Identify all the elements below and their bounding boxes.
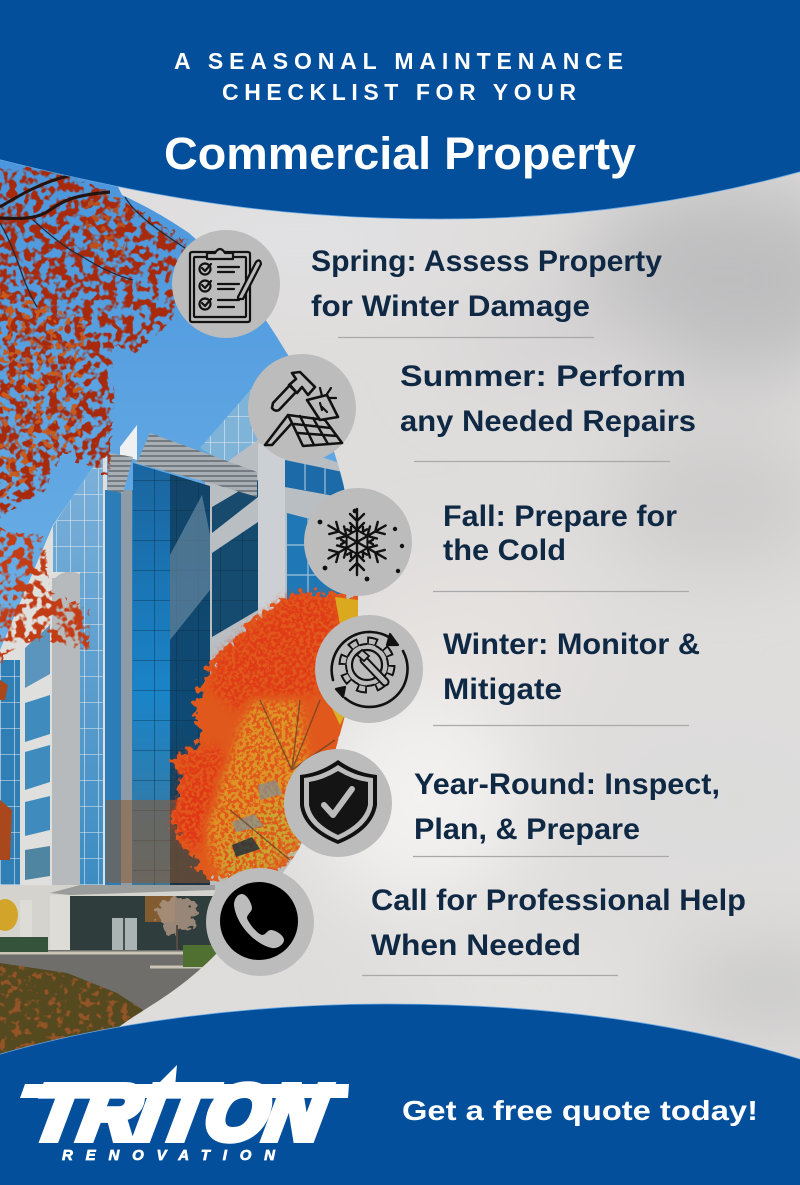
tree canopy base — [170, 593, 358, 880]
photo: office building with autumn trees — [0, 150, 360, 1070]
step 5: year-round — [284, 749, 720, 857]
building upper rear glass — [200, 388, 258, 462]
tree gaps and branches — [232, 780, 282, 832]
step 2: summer — [248, 354, 696, 462]
step 6: professional help — [206, 868, 746, 976]
logo tagline: RENOVATION — [62, 1147, 276, 1164]
step 1: spring — [172, 230, 663, 338]
call to action: Get a free quote today! — [402, 1095, 758, 1126]
title — [164, 48, 636, 179]
building roof louvers — [107, 425, 257, 497]
bottom blue footer band — [0, 1004, 800, 1185]
step 1 text: Spring: Assess Property — [311, 245, 663, 278]
step 1 text: for Winter Damage — [311, 290, 590, 323]
step 4: winter — [315, 615, 700, 726]
tree limbs — [0, 175, 72, 207]
building right wing — [205, 437, 360, 900]
icon: shield with check — [284, 749, 392, 857]
icon: gear and wrench with cycle arrows — [315, 615, 423, 723]
step 6 text: When Needed — [371, 929, 581, 962]
step 2 text: Summer: Perform — [400, 360, 686, 393]
step 4 text: Mitigate — [443, 673, 562, 706]
step 5 text: Year-Round: Inspect, — [414, 768, 720, 801]
red maple branches, lower left — [0, 530, 90, 931]
red maple branches, upper left — [0, 168, 188, 520]
icon: hammer and roof shingles — [248, 354, 356, 462]
icon: clipboard checklist — [172, 230, 280, 338]
logo wordmark: TRITON — [27, 1071, 334, 1156]
foreground planting bed — [0, 963, 143, 1054]
building left wing — [0, 453, 107, 885]
logo top bar — [20, 1084, 349, 1098]
step 2 text: any Needed Repairs — [400, 405, 696, 438]
tree amber centre and lower foliage — [205, 700, 310, 878]
top blue header band — [0, 0, 800, 219]
building entrance and lobby — [0, 885, 215, 953]
step 6 text: Call for Professional Help — [371, 884, 746, 917]
building central glass tower — [105, 463, 210, 885]
logo: Triton Renovation — [20, 1065, 349, 1164]
step 3 text: the Cold — [443, 534, 566, 567]
logo spike — [155, 1065, 177, 1087]
icon: snowflake — [304, 488, 412, 596]
step 3 text: Fall: Prepare for — [443, 500, 678, 533]
step 5 text: Plan, & Prepare — [414, 813, 640, 846]
main heading: Commercial Property — [164, 128, 636, 179]
icon: telephone — [206, 868, 314, 976]
tree red-orange top and left foliage — [172, 595, 340, 850]
step 3: fall — [304, 488, 689, 596]
title line 2: CHECKLIST FOR YOUR — [222, 79, 576, 105]
ground and pavement — [0, 896, 230, 1020]
orange maple tree — [170, 593, 358, 880]
title line 1: A SEASONAL MAINTENANCE — [174, 48, 623, 74]
sky — [0, 150, 360, 650]
step 4 text: Winter: Monitor & — [443, 628, 700, 661]
